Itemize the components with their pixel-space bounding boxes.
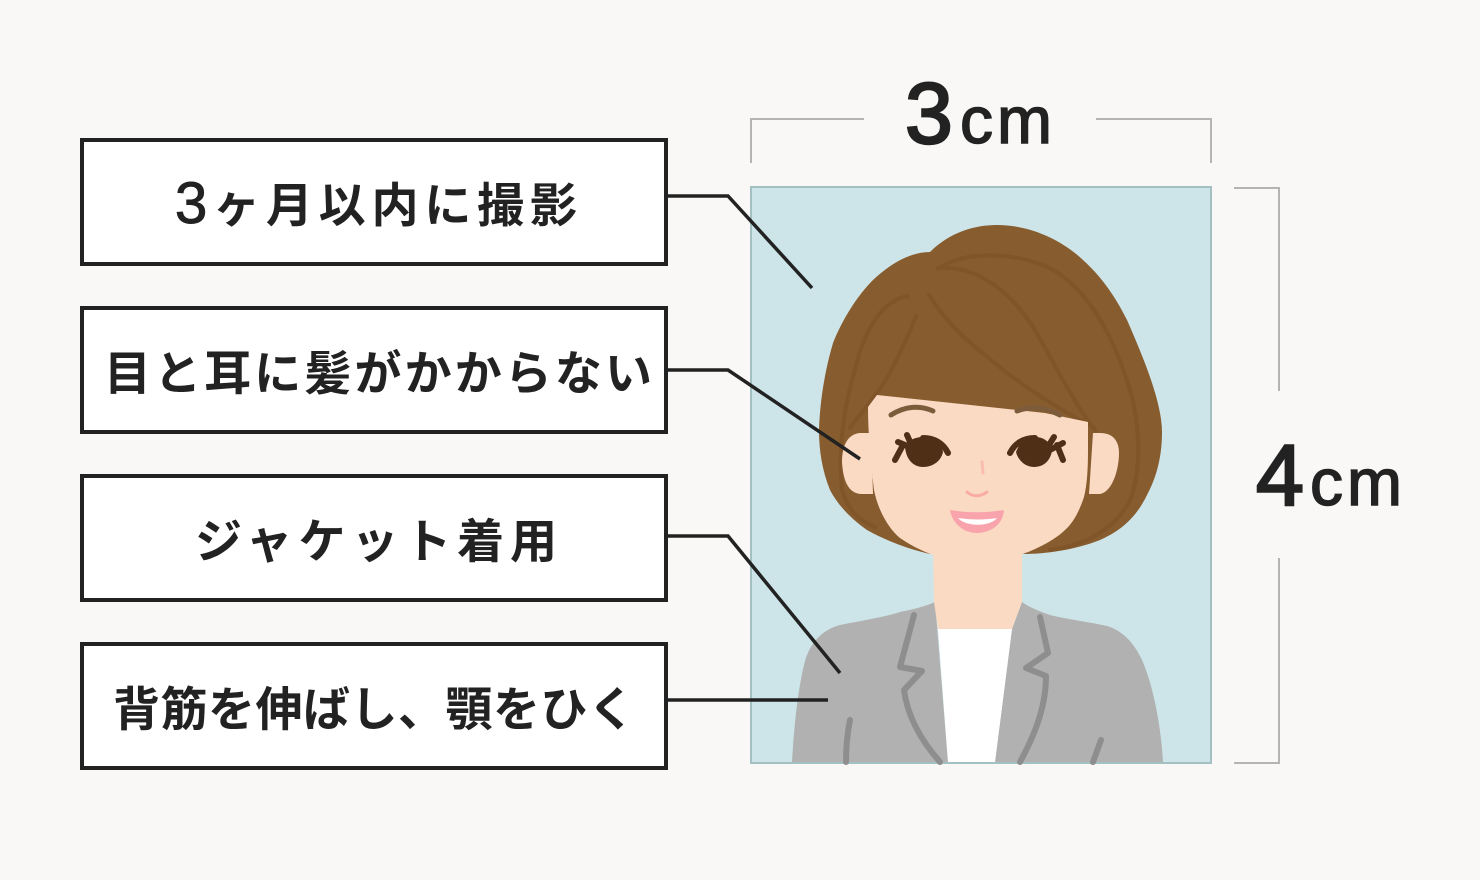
callout: within 3 months: ヶ月以内に撮影 [213,167,577,236]
illustration: jacket [792,602,1163,762]
callout: posture: 背筋を伸ばし、顎をひく [113,671,635,740]
panel: ID photo [751,187,1211,763]
width dimension: 3cm [751,66,1211,163]
width dimension: 3cm: 3 [905,66,953,162]
height dimension: 4cm: cm [1310,445,1406,519]
illustration: shirt [938,629,1012,762]
illustration: ears [842,433,1119,494]
nose [982,462,983,473]
illustration: face [868,395,1088,555]
callout: wear jacket [82,476,666,600]
illustration: hair [819,225,1162,554]
height dimension: 4cm [1234,188,1406,763]
callout: eyes and ears clear [82,308,666,432]
leader lines [667,196,860,700]
callout: within 3 months [82,140,666,264]
height dimension: 4cm: 4 [1256,428,1304,524]
mouth [950,510,1004,533]
brows [891,407,933,415]
callout: posture [82,644,666,768]
eyes [895,435,1063,467]
illustration: neck [933,545,1022,629]
width dimension: 3cm: cm [960,83,1056,157]
callout: within 3 months: 3 [175,171,207,236]
callout: wear jacket: ジャケット着用 [195,503,557,572]
callout: eyes and ears clear: 目と耳に髪がかからない [104,335,652,404]
